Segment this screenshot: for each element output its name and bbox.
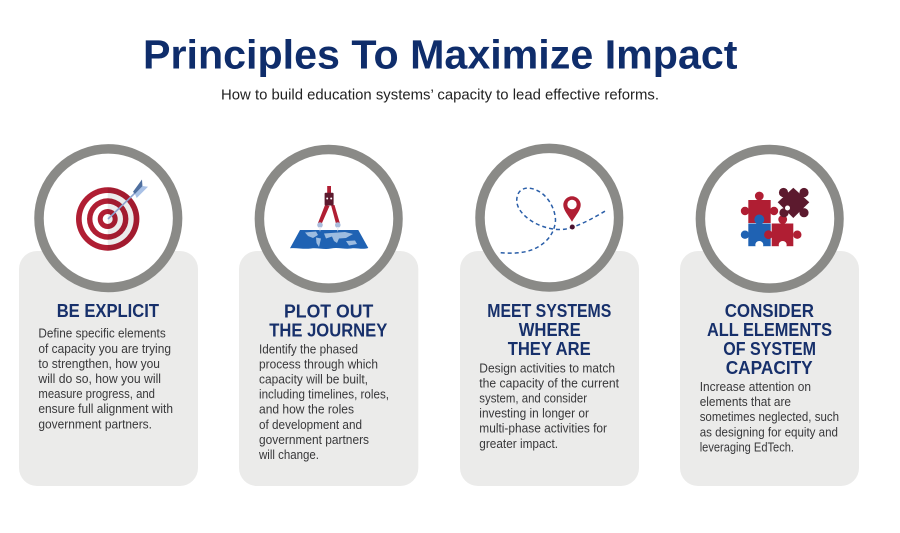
body text [700,379,839,454]
heading: CONSIDER [725,301,814,321]
heading [707,301,832,378]
body text: government partners. [38,416,152,431]
body text: Design activities to match [479,360,615,375]
card background [460,251,639,486]
heading: CAPACITY [726,358,813,378]
panel: consider all elements of system capacity [680,150,859,486]
body text: elements that are [700,394,791,409]
subtitle: How to build education systems’ capacity to lead effective reforms. [221,86,659,103]
body text: investing in longer or [479,406,590,421]
body text: and how the roles [259,402,354,417]
card background [19,251,198,486]
body text: process through which [259,356,378,371]
body text: to strengthen, how you [38,356,160,371]
body text: leveraging EdTech. [700,439,794,454]
body text: measure progress, and [38,386,155,401]
body text [479,360,619,451]
heading: ALL ELEMENTS [707,320,832,340]
panel: plot out the journey [239,150,418,486]
ring [259,150,398,288]
body text [37,326,173,431]
body text: capacity will be built, [259,372,368,386]
heading [269,301,387,340]
body text: ensure full alignment with [38,401,173,416]
heading: OF SYSTEM [723,339,816,359]
icon: compass on world map [290,186,368,249]
icon: target with arrow [76,180,148,251]
icon: dashed route with location pin [501,188,607,253]
body text: the capacity of the current [479,375,619,390]
heading: PLOT OUT [284,301,373,321]
heading: THE JOURNEY [269,320,387,340]
heading [487,301,611,359]
body text: sometimes neglected, such [700,409,839,424]
ring [480,148,619,287]
ring [700,150,839,288]
body text: system, and consider [479,390,588,406]
title: Principles To Maximize Impact [143,31,738,77]
icon: puzzle pieces [741,188,809,249]
ring [39,149,178,288]
card background [239,251,418,486]
body text: will do so, how you will [37,371,161,386]
body text: Increase attention on [700,379,811,394]
body text: greater impact. [479,436,558,451]
body text [258,341,389,462]
heading: BE EXPLICIT [57,301,159,321]
body text: will change. [258,447,319,462]
body text: government partners [259,432,369,447]
panel: be explicit [19,149,198,486]
heading: THEY ARE [508,339,591,359]
body text: Identify the phased [259,341,358,356]
card background [680,251,859,486]
heading: MEET SYSTEMS [487,301,611,321]
body text: Define specific elements [38,326,166,341]
body text: of development and [259,417,362,432]
body text: multi-phase activities for [479,421,608,436]
body text: including timelines, roles, [259,387,389,402]
heading: WHERE [519,320,581,340]
panel: meet systems where they are [460,148,639,486]
body text: of capacity you are trying [38,341,171,356]
body text: as designing for equity and [700,424,838,439]
